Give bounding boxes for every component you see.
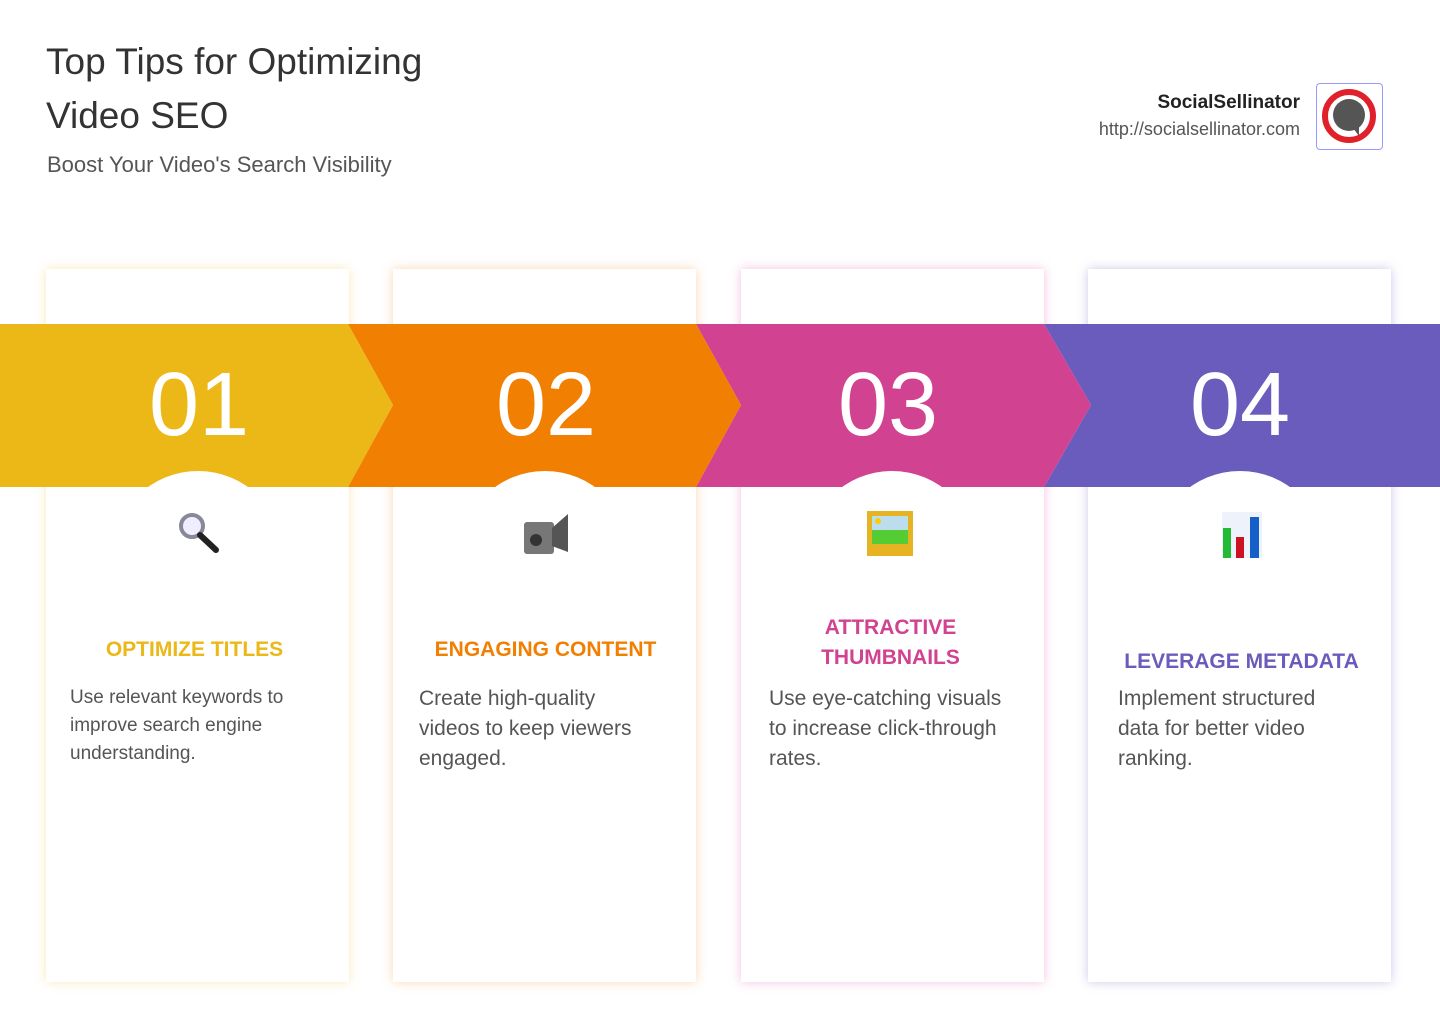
brand text: SocialSellinator <box>1157 92 1300 113</box>
card 1 <box>46 269 349 982</box>
number band: 02 <box>496 355 596 455</box>
icon: picture <box>867 511 913 556</box>
text: THUMBNAILS <box>821 646 960 669</box>
text: Implement structured data for better video ranking. <box>1118 687 1315 770</box>
text: OPTIMIZE TITLES <box>106 638 283 661</box>
card 1 text <box>70 638 283 764</box>
icon: magnifier <box>181 515 216 550</box>
icon: camera <box>524 514 568 554</box>
number band: 01 <box>149 355 249 455</box>
text: ATTRACTIVE <box>825 616 956 639</box>
subtitle: Boost Your Video's Search Visibility <box>47 152 392 177</box>
title <box>46 41 422 136</box>
text: LEVERAGE METADATA <box>1124 650 1359 673</box>
card 4 text <box>1118 650 1359 770</box>
card 2 text <box>419 638 656 770</box>
text: Use eye-catching visuals to increase click-through rates. <box>769 687 1001 770</box>
text: ENGAGING CONTENT <box>435 638 656 661</box>
brand text <box>1099 92 1300 139</box>
title: Video SEO <box>46 95 228 136</box>
card 2 <box>393 269 696 982</box>
title: Top Tips for Optimizing <box>46 41 422 82</box>
number band: 03 <box>838 355 938 455</box>
card 3 text <box>769 616 1001 770</box>
card 3 <box>741 269 1044 982</box>
card 4 <box>1088 269 1391 982</box>
brand text: http://socialsellinator.com <box>1099 119 1300 139</box>
text: Create high-quality videos to keep viewers engaged. <box>419 687 631 770</box>
text: Use relevant keywords to improve search engine understanding. <box>70 687 283 764</box>
number band: 04 <box>1190 355 1290 455</box>
logo <box>1316 83 1383 150</box>
icon: chart <box>1222 512 1262 558</box>
